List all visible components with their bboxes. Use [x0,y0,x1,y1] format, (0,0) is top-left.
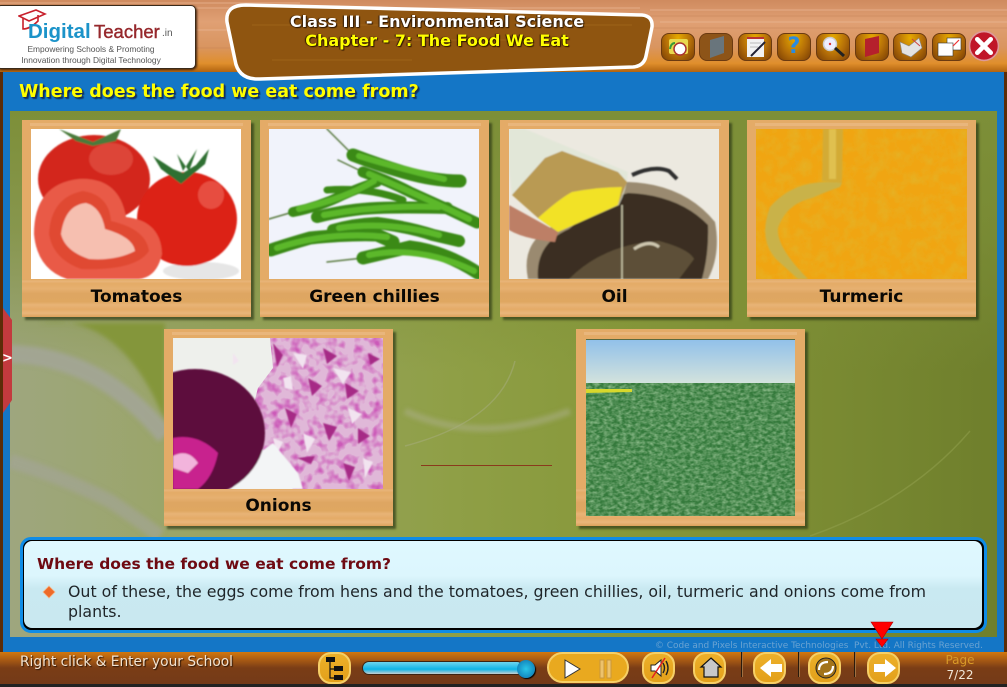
card: green chillies [260,120,489,317]
logo wordmark: Digital [28,20,91,43]
label: oil: Oil [601,287,628,307]
logo tagline [21,44,161,65]
label: turmeric: Turmeric [820,287,903,307]
card: oil [500,120,729,317]
green backdrop [10,111,997,637]
icon: dictionary [855,33,889,61]
chapter title text: Class III - Environmental Science [290,12,584,31]
icon: history folder [661,33,695,61]
icon: red pointer [870,622,894,648]
card: field [576,329,805,526]
icon: help: ? [788,34,800,59]
icon: home button [693,652,726,684]
logo wordmark: .in [162,28,173,39]
icon: notepad [738,33,772,61]
card: turmeric [747,120,976,317]
photo: green chillies [269,129,479,279]
side tab arrow: > [2,351,13,366]
callout: explanation [20,537,987,633]
card: onions [164,329,393,526]
icon: refresh button [808,652,841,684]
bullet icon [42,586,56,598]
icon: search [816,33,850,61]
icon: window resize [932,33,966,61]
icon: next button [867,652,900,684]
icon: open book [893,33,927,61]
chapter title text: Chapter - 7: The Food We Eat [305,31,569,50]
label: green chillies: Green chillies [309,287,440,307]
label: onions: Onions [245,496,312,516]
icon: help [777,33,811,61]
label: tomatoes: Tomatoes [91,287,182,307]
page number: Page [945,653,975,667]
logo tagline: Empowering Schools & Promoting [27,44,155,54]
page number [945,653,975,682]
icon: back button [753,652,786,684]
icon: mute button [642,652,675,684]
photo: oil [509,129,719,279]
logo tagline: Innovation through Digital Technology [21,55,161,65]
chapter title plaque [225,3,654,81]
logo wordmark [28,20,173,43]
icon: play [564,659,581,679]
icon: close [968,30,1000,62]
logo panel [0,5,196,69]
top wood bar [0,0,1007,72]
logo cap icon [18,9,47,30]
icon: site map button [318,652,351,684]
side tab [3,308,12,413]
page number: 7/22 [947,668,973,682]
chapter title text [289,12,585,51]
play pause button [547,652,629,683]
icon: pause [600,660,612,678]
bottom wood bar [0,652,1007,684]
school text: Right click & Enter your School [20,654,233,670]
copyright: © Code and Pixels Interactive Technologies Pvt. Ltd. All Rights Reserved. [655,641,983,651]
logo wordmark: Teacher [94,21,160,42]
photo: turmeric [756,129,967,279]
header: lesson question: Where does the food we eat come from? [19,82,419,102]
line: connector [421,465,552,466]
photo: crop field [586,339,795,516]
card: tomatoes [22,120,251,317]
icon: reference book [699,33,733,61]
photo: tomatoes [31,129,241,279]
progress slider [363,662,523,674]
slider knob [517,660,535,678]
photo: onions [173,338,383,489]
callout body text: Out of these, the eggs come from hens and the tomatoes, green chillies, oil, turmeric and onions come from plants. [68,582,926,621]
toolbar icons [661,30,1000,62]
callout heading: Where does the food we eat come from? [37,555,391,573]
